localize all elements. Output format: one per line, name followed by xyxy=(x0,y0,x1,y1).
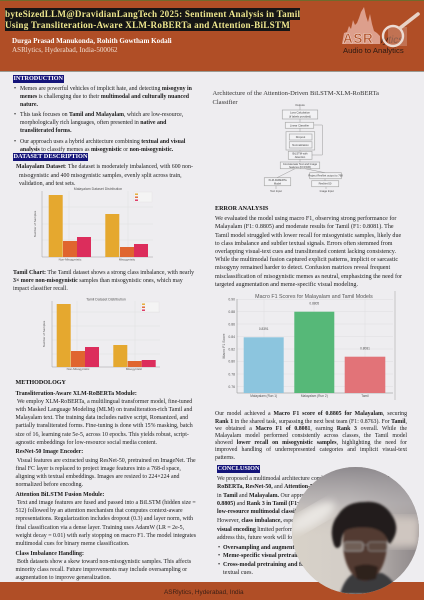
error analysis text: While the multimodal fusion captured explicit patterns, implicit or sarcastic xyxy=(215,257,398,263)
tamil chart text: Tamil Chart: The Tamil dataset shows a strong class imbalance, with nearly xyxy=(13,270,194,276)
chart: Tamil dataset distribution: Misogynistic xyxy=(126,367,143,371)
chart: Macro F1 scores: 0.86 xyxy=(228,322,235,326)
bullet 3: analysis to classify memes as misogynistic or non-misogynistic. xyxy=(20,147,173,153)
bullet 1: • xyxy=(14,86,16,92)
architecture diagram: Outputs xyxy=(295,103,305,107)
transliteration module: with Masked Language Modeling (MLM) on transliteration-rich Tamil and xyxy=(16,407,192,413)
conclusion limits xyxy=(217,518,372,541)
bullet 2: transliterated forms. xyxy=(20,128,72,134)
architecture diagram: Concatenate Text and Image xyxy=(283,162,318,166)
tamil chart text xyxy=(13,270,194,292)
error analysis text: targeted augmentation and meme-specific visual modeling. xyxy=(215,282,358,288)
title: Using Transliteration-Aware XLM-RoBERTa and Attention-BiLSTM xyxy=(5,20,290,30)
bullet 2: This task focuses on Tamil and Malayalam, which are low-resource, xyxy=(20,112,183,118)
chart: Macro F1 scores: Tamil xyxy=(361,394,369,398)
chart: Macro F1 scores: 0.80 xyxy=(228,360,235,364)
chart: Malayalam dataset distribution: Number of Samples xyxy=(33,210,37,237)
logo: ASRlytics: lytics xyxy=(381,35,403,46)
bullet 1: Memes are powerful vehicles of implicit hate, and detecting misogyny in xyxy=(20,86,192,92)
footer band xyxy=(0,582,424,600)
error analysis text: Tamil model struggled with lower recall for misogynistic samples, likely due xyxy=(215,233,401,239)
heading: dataset description: DATASET DESCRIPTION xyxy=(14,153,88,160)
conclusion bullets: Oversampling and augmentation xyxy=(223,545,307,551)
attention module: weight decay = 0.01) with early stopping on macro F1. The model integrates xyxy=(16,533,196,539)
attention module: final classification via a dense layer. Training uses AdamW (LR = 2e-5, xyxy=(16,525,184,531)
results paragraph xyxy=(215,410,407,461)
intro bullets xyxy=(14,86,192,153)
chart: Tamil dataset distribution: Tamil Dataset Distribution xyxy=(86,298,126,302)
class imbalance: minority class recall. Future improvements may include oversampling or xyxy=(16,567,187,573)
transliteration module: size of 16, learning rate 5e-5, across 10 epochs. This yields robust, script- xyxy=(16,432,189,438)
chart: Tamil dataset distribution xyxy=(42,298,160,371)
chart: Malayalam dataset distribution: Malayalam Dataset Distribution xyxy=(74,187,122,191)
resnet encoder: final FC layer is replaced to project image features into a 768-d space, xyxy=(16,466,181,472)
chart: Malayalam dataset distribution: Misogynistic xyxy=(119,258,136,262)
chart: Macro F1 scores xyxy=(222,291,396,400)
malayalam dataset text xyxy=(16,164,193,187)
malayalam dataset text: Malayalam Dataset: The dataset is moderately imbalanced, with 600 non- xyxy=(16,164,193,170)
architecture diagram: Dropout xyxy=(296,135,306,139)
architecture diagram: Model xyxy=(274,182,282,186)
conclusion text: 0.8805) and Rank 3 in Tamil (F1: 0.8081), showing the promise of xyxy=(217,501,377,507)
error analysis text: Malayalam (F1: 0.8805) and moderate results for Tamil (F1: 0.8081). The xyxy=(215,224,394,230)
architecture heading: Architecture of the Attention-Driven BiLSTM-XLM-RoBERTa xyxy=(212,90,379,97)
results paragraph: Rank 1 in the shared task, surpassing the next best team (F1: 0.8763). For Tamil, xyxy=(215,419,407,425)
title xyxy=(5,8,300,31)
architecture heading: Classifier xyxy=(212,98,238,106)
methodology text xyxy=(16,390,196,581)
header band xyxy=(0,0,424,72)
error analysis text: We evaluated the model using macro F1, observing strong performance for xyxy=(215,216,396,222)
bullet 2 xyxy=(14,112,183,134)
conclusion limits: address this, future work will focus on: xyxy=(217,535,309,541)
footer text: ASRlytics, Hyderabad, India xyxy=(164,588,244,596)
conclusion text: We proposed a multimodal architecture combining text and image: XLM- xyxy=(217,476,391,482)
heading: methodology: METHODOLOGY xyxy=(16,380,66,386)
bullet 3: Our approach uses a hybrid architecture combining textual and visual xyxy=(20,138,185,144)
bullet 1 xyxy=(14,86,192,108)
malayalam dataset text: misogynistic and 400 misogynistic samples, evenly split across train, xyxy=(19,173,182,179)
heading: introduction: INTRODUCTION xyxy=(14,75,63,82)
attention module: multimodal cues for binary meme classification. xyxy=(16,541,129,547)
results paragraph: Our model achieved a Macro F1 score of 0.8805 for Malayalam, securing xyxy=(215,411,407,417)
error analysis text: to class imbalance and subtler textual signals. Errors often stemmed from xyxy=(215,241,392,247)
chart: Macro F1 scores: 0.82 xyxy=(228,347,235,351)
chart: Macro F1 scores: Malayalam (Run 2) xyxy=(301,394,328,398)
architecture diagram: Image Input xyxy=(320,189,334,193)
title: byteSizedLLM@DravidianLangTech 2025: Sentiment Analysis in Tamil xyxy=(5,9,300,19)
error analysis text: misogyny remained harder to detect. Confusion matrices reveal frequent xyxy=(215,265,390,271)
bullet 2: • xyxy=(14,112,16,118)
architecture diagram: Attention xyxy=(295,155,306,159)
architecture diagram: Project ResNet output to 768 xyxy=(308,174,343,178)
error analysis text xyxy=(215,216,402,288)
malayalam dataset text: validation, and test sets. xyxy=(19,181,75,187)
chart: Macro F1 scores: 0.78 xyxy=(228,372,235,376)
architecture diagram: Loss Calculation xyxy=(290,110,310,114)
chart: Macro F1 scores: 0.88 xyxy=(228,310,235,314)
conclusion bullets: textual cues. xyxy=(223,570,253,576)
resnet encoder: Visual features are extracted using ResNet-50, pretrained on ImageNet. The xyxy=(17,458,196,464)
resnet encoder: ResNet-50 Image Encoder: xyxy=(16,449,83,455)
bullet 3 xyxy=(14,138,186,153)
conclusion limits: However, class imbalance, especially in Tamil, and limited xyxy=(217,518,358,524)
attention module: representations. Regularization includes dropout (0.3) and layer norm, with xyxy=(16,516,193,522)
results paragraph: Malayalam model performed consistently across classes, the Tamil model xyxy=(215,433,407,439)
conclusion text: RoBERTa, ResNet-50, and Attention-BiLSTM for misogyny detection xyxy=(217,484,388,490)
chart: Macro F1 scores: 0.8805 xyxy=(309,302,319,306)
logo: ASRlytics xyxy=(342,7,420,55)
transliteration module: agnostic embeddings for low-resource social media content. xyxy=(16,440,157,446)
error analysis text: misclassification of misogynistic memes as neutral, emphasizing the need for xyxy=(215,274,402,280)
chart: Malayalam dataset distribution xyxy=(33,187,153,262)
attention module: 512) followed by an attention mechanism that computes context-aware xyxy=(16,508,183,514)
authors xyxy=(12,37,172,54)
transliteration module: Transliteration-Aware XLM-RoBERTa Module: xyxy=(16,391,137,397)
logo: ASRlytics: ASR xyxy=(343,31,373,46)
architecture diagram: Linear Classifier xyxy=(290,123,309,127)
architecture diagram: ResNet-50 xyxy=(319,182,332,186)
conclusion bullets: Meme-specific visual pretraining xyxy=(223,553,307,559)
chart: Tamil dataset distribution: Non-Misogynistic xyxy=(67,367,90,371)
authors: Durga Prasad Manukonda, Rohith Gowtham Kodali xyxy=(12,37,172,45)
transliteration module xyxy=(16,390,193,446)
chart: Macro F1 scores: 0.76 xyxy=(228,385,235,389)
transliteration module: Malayalam text. The training data includes native script, Romanized, and xyxy=(16,415,188,421)
presenter photo xyxy=(292,467,418,594)
tamil chart text: impact classifier recall. xyxy=(13,286,68,292)
bullet 3: • xyxy=(14,138,16,144)
chart: Macro F1 scores: Malayalam (Run 1) xyxy=(250,394,277,398)
transliteration module: We employ XLM-RoBERTa, a multilingual transformer model, fine-tuned xyxy=(17,399,192,405)
logo: ASRlytics: Audio to Analytics xyxy=(343,46,404,55)
chart: Macro F1 scores: Macro F1 Score xyxy=(222,334,226,358)
bullet 1: nature. xyxy=(20,102,38,108)
class imbalance: Class Imbalance Handling: xyxy=(16,551,84,557)
class imbalance: augmentation to improve generalization. xyxy=(16,575,111,581)
conclusion bullets: • xyxy=(218,545,220,551)
chart: Tamil dataset distribution: Number of Samples xyxy=(42,320,46,347)
conclusion text xyxy=(217,476,391,576)
chart: Macro F1 scores: 0.8391 xyxy=(259,327,269,331)
conclusion bullets xyxy=(218,544,315,576)
conclusion text: in Tamil and Malayalam. Our approach achieved Rank 1 (F1: xyxy=(217,493,367,499)
conclusion limits: visual encoding limited performance on subtle, implicit cases. To xyxy=(217,527,372,533)
chart: Macro F1 scores: 0.90 xyxy=(228,298,235,302)
tamil chart text: 3× more non-misogynistic samples than misogynistic ones, which may xyxy=(13,278,183,284)
bullet 2: morphologically rich languages, often presented in native and xyxy=(20,120,166,126)
results paragraph: we obtained a Macro F1 of 0.8081, earning Rank 3 overall. While the xyxy=(215,426,407,432)
architecture diagram xyxy=(264,103,343,193)
architecture diagram: XLM-RoBERTa xyxy=(268,178,287,182)
results paragraph: showed lower recall on misogynistic samples, highlighting the need for xyxy=(215,440,407,446)
conclusion bullets: Cross-modal pretraining and fusion xyxy=(223,562,315,568)
resnet encoder: aligning with textual embeddings. Images are resized to 224×224 and xyxy=(16,474,179,480)
conclusion bullets: • xyxy=(218,562,220,568)
class imbalance: Both datasets show a skew toward non-misogynistic samples. This affects xyxy=(17,559,191,565)
architecture diagram: features (D=1536) xyxy=(289,165,311,169)
attention module: Text and image features are fused and passed into a BiLSTM (hidden size = xyxy=(17,500,196,506)
bullet 1: memes is challenging due to their multimodal and culturally nuanced xyxy=(20,94,189,100)
conclusion text: low-resource multimodal classification. xyxy=(217,509,315,515)
authors: ASRlytics, Hyderabad, India-500062 xyxy=(12,46,118,54)
class imbalance xyxy=(16,550,191,581)
heading: conclusion: CONCLUSION xyxy=(218,465,259,472)
error analysis text: overlapping visual-text cues and transliterated content lacking consistency. xyxy=(215,249,396,255)
attention module: Attention BiLSTM Fusion Module: xyxy=(16,492,104,498)
resnet encoder xyxy=(16,448,196,488)
architecture heading xyxy=(212,90,379,106)
architecture diagram: Text Input xyxy=(270,189,282,193)
architecture diagram: BiLSTM with xyxy=(292,152,308,156)
architecture diagram: Normalization xyxy=(292,143,309,147)
attention module xyxy=(16,492,196,547)
chart: Macro F1 scores: 0.84 xyxy=(228,335,235,339)
chart: Macro F1 scores: 0.8081 xyxy=(360,347,370,351)
chart: Macro F1 scores: Macro F1 Scores for Malayalam and Tamil Models xyxy=(255,294,373,300)
resnet encoder: normalized before encoding. xyxy=(16,482,83,488)
heading: error analysis: ERROR ANALYSIS xyxy=(215,206,268,212)
architecture diagram: (if labels provided) xyxy=(289,114,311,118)
results paragraph: patterns. xyxy=(215,455,235,461)
chart: Malayalam dataset distribution: Non-Misogynistic xyxy=(59,258,82,262)
transliteration module: partially transliterated forms. Fine-tuning is done with 15% masking, batch xyxy=(16,423,193,429)
conclusion bullets: • xyxy=(218,553,220,559)
results paragraph: improved handling of underrepresented categories and implicit visual-text xyxy=(215,447,407,453)
